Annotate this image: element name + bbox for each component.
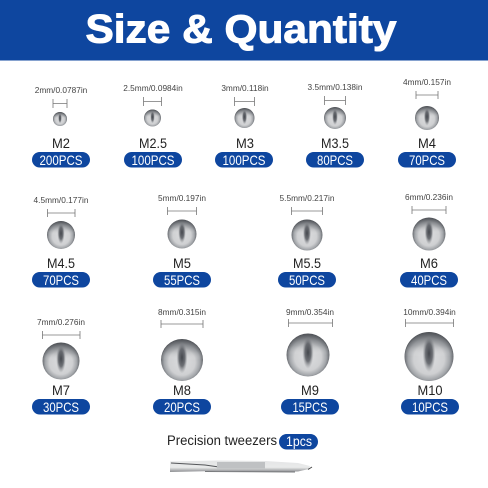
item M7: M7 (52, 382, 70, 398)
item M10: M10 (418, 382, 443, 398)
item M7: 30PCS (43, 399, 79, 415)
tweezers label (167, 433, 318, 450)
item M8: M8 (173, 382, 191, 398)
item M5.5 (278, 193, 336, 288)
item M4.5: 70PCS (43, 272, 79, 288)
item M3: 100PCS (222, 152, 266, 168)
item M3: M3 (236, 135, 254, 151)
item M2 (32, 85, 90, 168)
tweezers label: Precision tweezers (167, 433, 277, 448)
item M9 (281, 307, 339, 415)
item M8: 20PCS (164, 399, 200, 415)
tweezers label: 1pcs (286, 433, 312, 449)
item M5.5: 50PCS (289, 272, 325, 288)
item M10 (401, 307, 459, 415)
item M2: 2mm/0.0787in (35, 85, 88, 95)
item M5: M5 (173, 255, 191, 271)
item M6: 6mm/0.236in (405, 192, 453, 202)
item M5.5: M5.5 (293, 255, 321, 271)
item M7 (32, 317, 90, 415)
item M4.5: 4.5mm/0.177in (34, 195, 89, 205)
icon: tweezers (170, 460, 312, 472)
item M3.5: M3.5 (321, 135, 349, 151)
item M2.5: 2.5mm/0.0984in (123, 83, 183, 93)
item M10: 10PCS (412, 399, 448, 415)
item M5: 55PCS (164, 272, 200, 288)
item M6: 40PCS (411, 272, 447, 288)
item M8 (153, 307, 211, 415)
item M6: M6 (420, 255, 438, 271)
item M5 (153, 193, 211, 288)
item M2.5 (123, 83, 183, 168)
item M10: 10mm/0.394in (403, 307, 456, 317)
item M2: 200PCS (40, 152, 82, 168)
item M9: 15PCS (292, 399, 328, 415)
item M2.5: M2.5 (139, 135, 167, 151)
item M2.5: 100PCS (132, 152, 174, 168)
item M9: 9mm/0.354in (286, 307, 334, 317)
item M9: M9 (301, 382, 319, 398)
item M3.5: 3.5mm/0.138in (308, 82, 363, 92)
item M4: M4 (418, 135, 436, 151)
item M4.5: M4.5 (47, 255, 75, 271)
item M4 (398, 77, 456, 168)
item M4: 4mm/0.157in (403, 77, 451, 87)
item M3.5 (306, 82, 364, 168)
item M3: 3mm/0.118in (221, 83, 269, 93)
title banner (0, 0, 488, 60)
item M8: 8mm/0.315in (158, 307, 206, 317)
item M4: 70PCS (409, 152, 445, 168)
item M5: 5mm/0.197in (158, 193, 206, 203)
item M7: 7mm/0.276in (37, 317, 85, 327)
title banner: Size & Quantity (86, 8, 397, 52)
item M3.5: 80PCS (317, 152, 353, 168)
item M5.5: 5.5mm/0.217in (280, 193, 335, 203)
item M6 (400, 192, 458, 288)
item M2: M2 (52, 135, 70, 151)
item M4.5 (32, 195, 90, 288)
item M3 (215, 83, 273, 168)
